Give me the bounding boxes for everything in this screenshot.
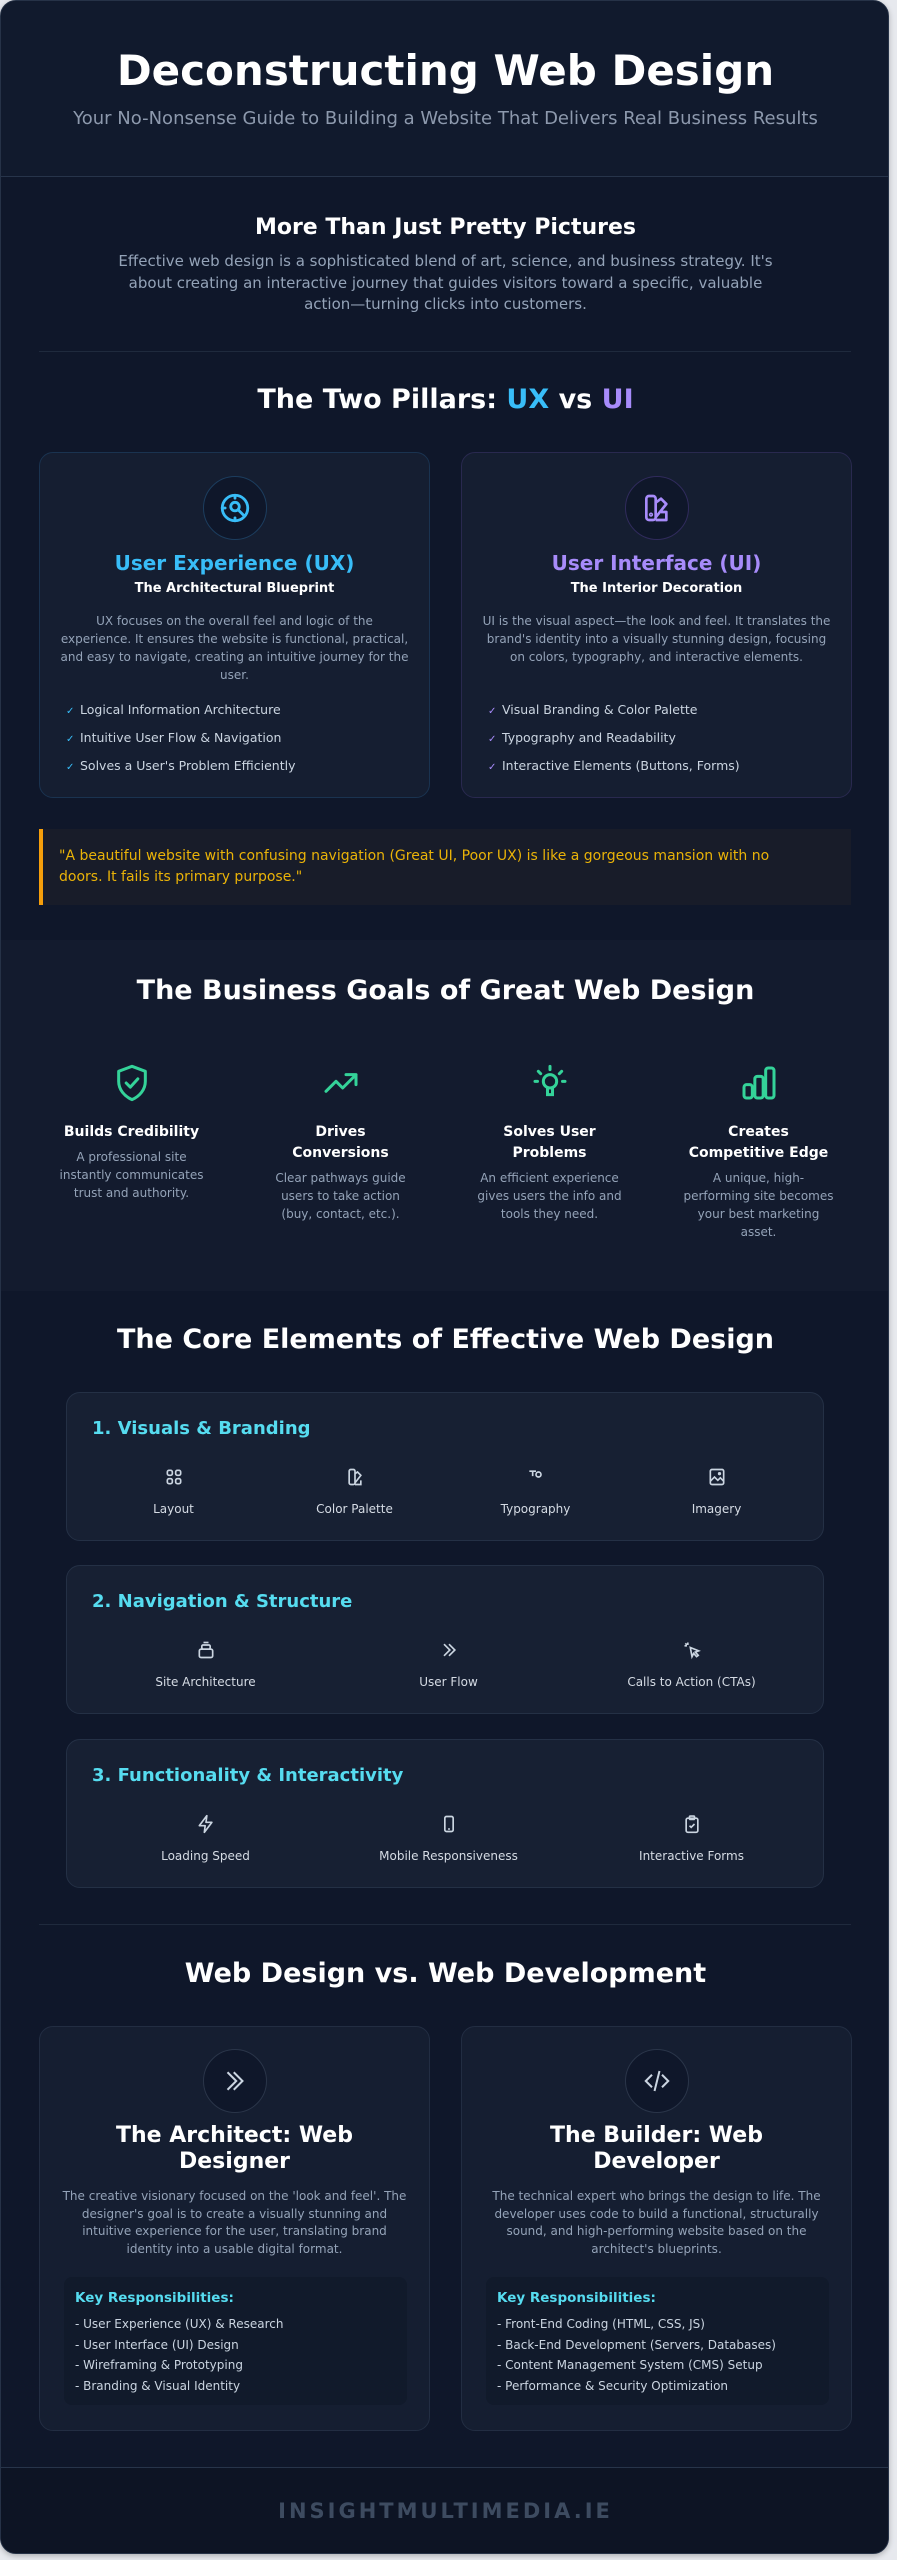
- developer title: [550, 2123, 763, 2174]
- goal: credibility: trust and authority.: [74, 1186, 189, 1200]
- UI list: ✓: [488, 734, 496, 745]
- footer brand: INSIGHTMULTIMEDIA.IE: [278, 2499, 613, 2523]
- icon: chevrons: [202, 2049, 266, 2113]
- developer responsibilities: Key Responsibilities:: [497, 2290, 656, 2306]
- heading: The Business Goals of Great Web Design: [137, 975, 754, 1006]
- section: business goals: [1, 940, 890, 1291]
- icon: trend: [324, 1073, 358, 1093]
- intro heading: More Than Just Pretty Pictures: [255, 215, 636, 240]
- UX body: and easy to navigate, creating an intuitive journey for the: [61, 650, 408, 664]
- UX list: Intuitive User Flow & Navigation: [80, 730, 281, 745]
- UX title: User Experience (UX): [115, 551, 354, 575]
- intro paragraph: Effective web design is a sophisticated blend of art, science, and business strategy. It's: [118, 252, 773, 270]
- goal: credibility: A professional site: [76, 1150, 187, 1164]
- goal: problems: [477, 1064, 622, 1221]
- developer title: Developer: [593, 2149, 720, 2174]
- designer responsibilities: - Branding & Visual Identity: [75, 2379, 240, 2393]
- icon: bars: [742, 1066, 776, 1100]
- UI list: ✓: [488, 762, 496, 773]
- designer body: [62, 2189, 406, 2256]
- UX body: experience. It ensures the website is functional, practical,: [61, 632, 408, 646]
- goal: conversions: [275, 1073, 406, 1221]
- intro paragraph: [118, 252, 773, 313]
- item: color palette: Color Palette: [316, 1502, 393, 1516]
- item: layout: Layout: [153, 1502, 194, 1516]
- footer: [1, 2467, 890, 2557]
- developer responsibilities: - Front-End Coding (HTML, CSS, JS): [497, 2317, 705, 2331]
- intro paragraph: about creating an interactive journey that guides visitors toward a specific, valuable: [129, 274, 762, 292]
- callout quote: "A beautiful website with confusing navigation (Great UI, Poor UX) is like a gorgeous mansion with no: [59, 848, 769, 864]
- developer responsibilities: - Performance & Security Optimization: [497, 2379, 728, 2393]
- item: typography: Typography: [501, 1502, 570, 1516]
- goal: credibility: instantly communicates: [60, 1168, 203, 1182]
- goal: conversions: Clear pathways guide: [275, 1171, 406, 1185]
- goal: edge: Competitive Edge: [689, 1145, 828, 1161]
- designer title: [116, 2123, 353, 2174]
- item: layout: [153, 1470, 194, 1516]
- panel: visuals & branding: [66, 1392, 824, 1541]
- UI list: Interactive Elements (Buttons, Forms): [502, 758, 740, 773]
- item: mobile: [379, 1816, 518, 1863]
- developer body: sound, and high-performing website based on the: [506, 2224, 806, 2238]
- item: CTAs: [627, 1642, 756, 1689]
- goal: problems: tools they need.: [501, 1207, 598, 1221]
- icon: code: [624, 2049, 688, 2113]
- UX list: ✓: [66, 734, 74, 745]
- goal: credibility: [60, 1064, 203, 1200]
- developer body: The technical expert who brings the design to life. The: [492, 2189, 821, 2203]
- developer body: developer uses code to build a functional, structurally: [494, 2207, 819, 2221]
- callout quote: doors. It fails its primary purpose.": [59, 869, 302, 885]
- panel: developer card: [461, 2026, 852, 2431]
- item: forms: Interactive Forms: [639, 1849, 744, 1863]
- item: imagery: Imagery: [692, 1502, 741, 1516]
- UX list: Solves a User's Problem Efficiently: [80, 758, 295, 773]
- developer responsibilities: [486, 2277, 829, 2405]
- goal: conversions: (buy, contact, etc.).: [281, 1207, 400, 1221]
- item: imagery: [692, 1468, 741, 1516]
- goal: edge: Creates: [728, 1124, 789, 1140]
- panel: designer card: [39, 2026, 430, 2431]
- UX list: Logical Information Architecture: [80, 702, 281, 717]
- item: site architecture: [155, 1642, 256, 1689]
- panel heading: 1. Visuals & Branding: [92, 1418, 311, 1439]
- header: [1, 1, 890, 177]
- icon: shield: [117, 1064, 147, 1102]
- developer responsibilities: - Back-End Development (Servers, Databases): [497, 2338, 776, 2352]
- designer responsibilities: [64, 2277, 407, 2405]
- designer responsibilities: - Wireframing & Prototyping: [75, 2358, 243, 2372]
- UI list: Typography and Readability: [502, 730, 676, 745]
- icon: UX target: [202, 476, 266, 540]
- goal: problems: gives users the info and: [477, 1189, 622, 1203]
- item: typography: [500, 1470, 570, 1516]
- goal: conversions: Drives: [315, 1124, 366, 1140]
- goal: edge: [683, 1066, 834, 1239]
- panel heading: 3. Functionality & Interactivity: [92, 1765, 403, 1786]
- UX body: user.: [220, 668, 249, 682]
- designer body: The creative visionary focused on the 'look and feel'. The: [63, 2189, 406, 2203]
- panel heading: 2. Navigation & Structure: [92, 1591, 352, 1612]
- UI body: UI is the visual aspect—the look and feel. It translates the: [483, 614, 830, 628]
- goal: edge: asset.: [741, 1225, 776, 1239]
- UI list: ✓: [488, 706, 496, 717]
- designer body: intuitive experience for the user, translating brand: [82, 2224, 387, 2238]
- UI list: Visual Branding & Color Palette: [502, 702, 697, 717]
- goal: edge: performing site becomes: [683, 1189, 834, 1203]
- title: Deconstructing Web Design: [117, 46, 774, 95]
- item: user flow: [419, 1644, 478, 1689]
- item: site architecture: Site Architecture: [155, 1675, 256, 1689]
- UI title: User Interface (UI): [552, 551, 761, 575]
- heading: core elements: The Core Elements of Effective Web Design: [117, 1324, 774, 1355]
- item: color palette: [316, 1468, 393, 1516]
- panel: navigation & structure: [66, 1565, 824, 1714]
- UI body: [483, 614, 830, 664]
- developer title: The Builder: Web: [550, 2123, 763, 2148]
- UX list: [66, 702, 296, 773]
- UX list: ✓: [66, 762, 74, 773]
- designer responsibilities: - User Interface (UI) Design: [75, 2338, 239, 2352]
- icon: UI swatch: [624, 476, 688, 540]
- developer body: architect's blueprints.: [591, 2242, 722, 2256]
- goal: problems: Solves User: [503, 1124, 596, 1140]
- callout quote: [39, 829, 851, 905]
- item: mobile: Mobile Responsiveness: [379, 1849, 518, 1863]
- item: user flow: User Flow: [419, 1675, 478, 1689]
- designer body: identity into a usable digital format.: [127, 2242, 342, 2256]
- goal: problems: An efficient experience: [480, 1171, 619, 1185]
- heading: design vs development: Web Design vs. Web Development: [185, 1958, 706, 1989]
- UX subtitle: The Architectural Blueprint: [135, 581, 334, 596]
- goal: conversions: Conversions: [292, 1145, 389, 1161]
- designer body: designer's goal is to create a visually stunning and: [82, 2207, 387, 2221]
- item: loading speed: Loading Speed: [161, 1849, 250, 1863]
- UI body: on colors, typography, and interactive elements.: [510, 650, 803, 664]
- goal: edge: your best marketing: [698, 1207, 819, 1221]
- intro paragraph: action—turning clicks into customers.: [304, 295, 587, 313]
- item: forms: [639, 1815, 744, 1863]
- UX body: UX focuses on the overall feel and logic of the: [96, 614, 373, 628]
- UX body: [61, 614, 408, 682]
- heading: two pillars: The Two Pillars: UX vs UI: [257, 384, 634, 415]
- designer responsibilities: - User Experience (UX) & Research: [75, 2317, 283, 2331]
- goal: edge: A unique, high-: [713, 1171, 804, 1185]
- panel: functionality: [66, 1739, 824, 1888]
- goal: conversions: users to take action: [281, 1189, 400, 1203]
- icon: bulb: [534, 1064, 566, 1096]
- UI subtitle: The Interior Decoration: [571, 581, 742, 596]
- designer title: Designer: [179, 2149, 290, 2174]
- developer responsibilities: - Content Management System (CMS) Setup: [497, 2358, 763, 2372]
- panel: UI card: [461, 452, 852, 798]
- goal: credibility: Builds Credibility: [64, 1124, 199, 1140]
- goal: problems: Problems: [512, 1145, 587, 1161]
- item: CTAs: Calls to Action (CTAs): [627, 1675, 756, 1689]
- UX list: ✓: [66, 706, 74, 717]
- UI body: brand's identity into a visually stunning design, focusing: [487, 632, 826, 646]
- designer title: The Architect: Web: [116, 2123, 353, 2148]
- subtitle: Your No-Nonsense Guide to Building a Website That Delivers Real Business Results: [73, 108, 818, 129]
- designer responsibilities: Key Responsibilities:: [75, 2290, 234, 2306]
- panel: UX card: [39, 452, 430, 798]
- UI list: [488, 702, 740, 773]
- item: loading speed: [161, 1814, 250, 1863]
- developer body: [492, 2189, 821, 2256]
